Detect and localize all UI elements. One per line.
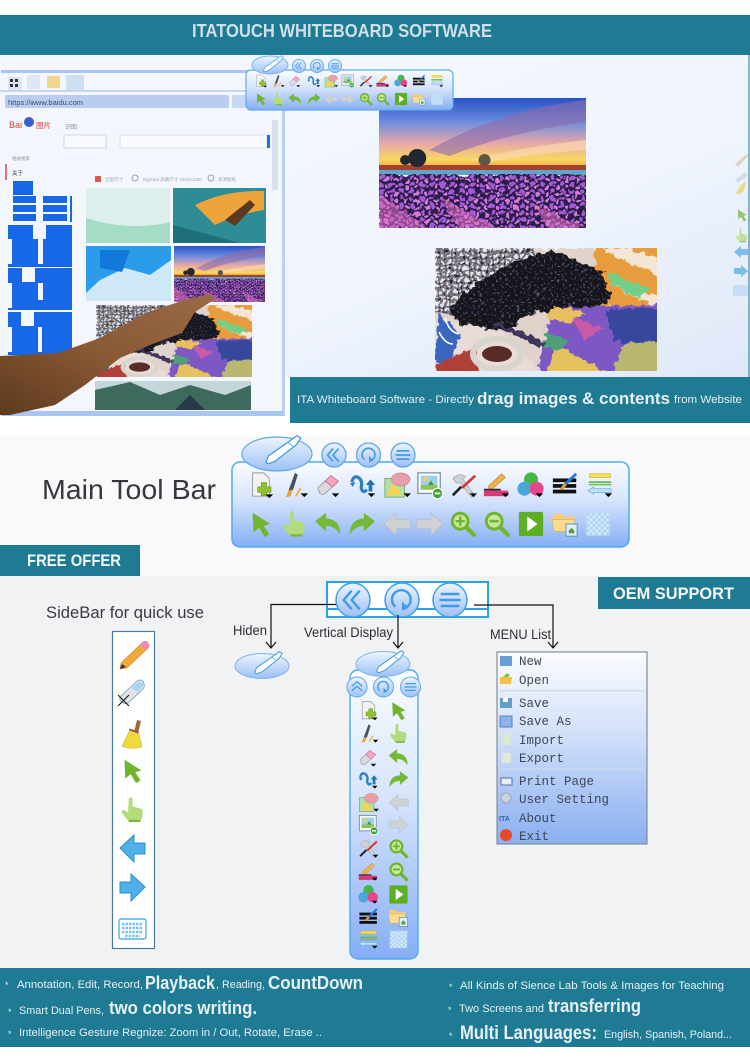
panel: feature section background: [0, 576, 750, 968]
label: Hiden: Hiden: [233, 623, 267, 638]
browser window: [0, 70, 286, 416]
hand pointing: [0, 294, 215, 415]
feature: playback line: Annotation, Edit, Record,: [17, 979, 143, 991]
feature: two screens line: [448, 996, 641, 1016]
feature: languages line: Multi Languages:: [460, 1023, 597, 1044]
dragon artwork: [435, 246, 661, 375]
heading: SideBar for quick use: SideBar for quick use: [46, 604, 204, 622]
flower photo: [379, 98, 590, 230]
arrow: hide: [266, 604, 336, 648]
menu list: User Setting: [519, 793, 609, 807]
filter row: 全部尺寸: [105, 176, 123, 183]
feature: playback line: Playback: [145, 973, 216, 993]
heading: Main Tool Bar: Main Tool Bar: [42, 474, 216, 505]
menu list: Exit: [519, 830, 549, 844]
panel: main tool bar section: [0, 436, 750, 576]
feature: two screens line: *: [448, 1005, 452, 1015]
feature: dual pens line: Smart Dual Pens,: [19, 1005, 104, 1017]
title banner: ITATOUCH WHITEBOARD SOFTWARE: [192, 20, 492, 41]
icon: pencil: [120, 641, 149, 669]
feature: two screens line: transferring: [548, 996, 641, 1016]
menu list: [497, 652, 647, 844]
browser window: 关于: [12, 169, 24, 177]
panel: whiteboard screenshot: [0, 55, 750, 416]
label: MENU List: MENU List: [490, 627, 551, 642]
browser window: 相关搜索: [12, 155, 30, 162]
feature: languages line: [449, 1023, 732, 1044]
thumbnail: sunset field: [174, 246, 267, 303]
menu list: Export: [519, 752, 564, 766]
thumbnail: blue watercolor: [86, 246, 171, 301]
feature: dual pens line: *: [8, 1007, 12, 1017]
feature: playback line: *: [5, 980, 9, 990]
arrow: menu list: [474, 605, 558, 648]
filter row: 高清壁纸: [218, 176, 236, 183]
icon: eraser: [118, 680, 144, 706]
feature: lab tools line: *: [449, 982, 453, 992]
menu list: About: [519, 812, 557, 826]
menu list: Save: [519, 697, 549, 711]
caption banner: [290, 377, 750, 423]
feature: playback line: [5, 973, 363, 993]
feature: playback line: , Reading,: [216, 979, 265, 991]
small main tool bar: [246, 56, 453, 110]
feature: languages line: *: [449, 1031, 453, 1041]
browser window: Bai: [9, 120, 22, 130]
sidebar blue list: [8, 181, 72, 355]
filter row: BigData 屏幕尺寸 1920x1080: [143, 176, 202, 183]
button strip: [327, 582, 488, 617]
vertical tool bar: [347, 651, 420, 959]
menu list: Print Page: [519, 775, 594, 789]
caption banner: ITA Whiteboard Software - Directly: [297, 394, 475, 406]
collapsed pen button: [235, 652, 289, 678]
icon: blue right arrow: [120, 874, 145, 901]
FREE OFFER tag: [0, 545, 140, 576]
icon: keyboard: [119, 919, 146, 939]
feature: gesture line: Intelligence Gesture Regnize: Zoom in / Out, Rotate, Erase ..: [19, 1027, 322, 1039]
feature: dual pens line: [8, 998, 257, 1018]
feature: two screens line: Two Screens and: [459, 1003, 544, 1015]
menu icons: ITA: [499, 816, 510, 823]
browser window: https://www.baidu.com: [8, 98, 83, 107]
footer feature band: [0, 968, 750, 1047]
menu list: Open: [519, 674, 549, 688]
menu list: Import: [519, 734, 564, 748]
icon: broom: [122, 720, 142, 748]
feature: gesture line: *: [8, 1029, 12, 1039]
arrow: vertical display: [393, 615, 403, 648]
feature: lab tools line: All Kinds of Sience Lab Tools & Images for Teaching: [460, 980, 724, 992]
label: Vertical Display: Vertical Display: [304, 625, 393, 640]
OEM SUPPORT tag: [598, 577, 750, 609]
OEM SUPPORT tag: OEM SUPPORT: [613, 584, 735, 603]
thumbnail: pale green: [86, 188, 170, 243]
vertical sidebar: [112, 632, 154, 948]
feature: dual pens line: two colors writing.: [109, 998, 257, 1018]
browser window: 图片: [36, 120, 51, 130]
menu list: Save As: [519, 715, 572, 729]
feature: languages line: English, Spanish, Poland...: [604, 1029, 732, 1041]
thumbnail: mountains: [95, 381, 251, 410]
menu icons: [499, 656, 512, 841]
thumbnail: colourful dragon: [96, 304, 255, 379]
faint on-screen sidebar: [733, 154, 748, 296]
thumbnail: orange and teal: [173, 188, 266, 243]
FREE OFFER tag: FREE OFFER: [27, 551, 121, 570]
browser window: 识图: [65, 124, 77, 131]
caption banner: from Website: [674, 394, 742, 406]
large tool bar: [232, 436, 629, 547]
filter row: [95, 175, 236, 183]
icon: blue left arrow: [120, 835, 145, 862]
caption banner: drag images & contents: [477, 390, 670, 408]
feature: playback line: CountDown: [268, 973, 363, 993]
menu list: New: [519, 655, 542, 669]
title banner: [0, 15, 750, 55]
